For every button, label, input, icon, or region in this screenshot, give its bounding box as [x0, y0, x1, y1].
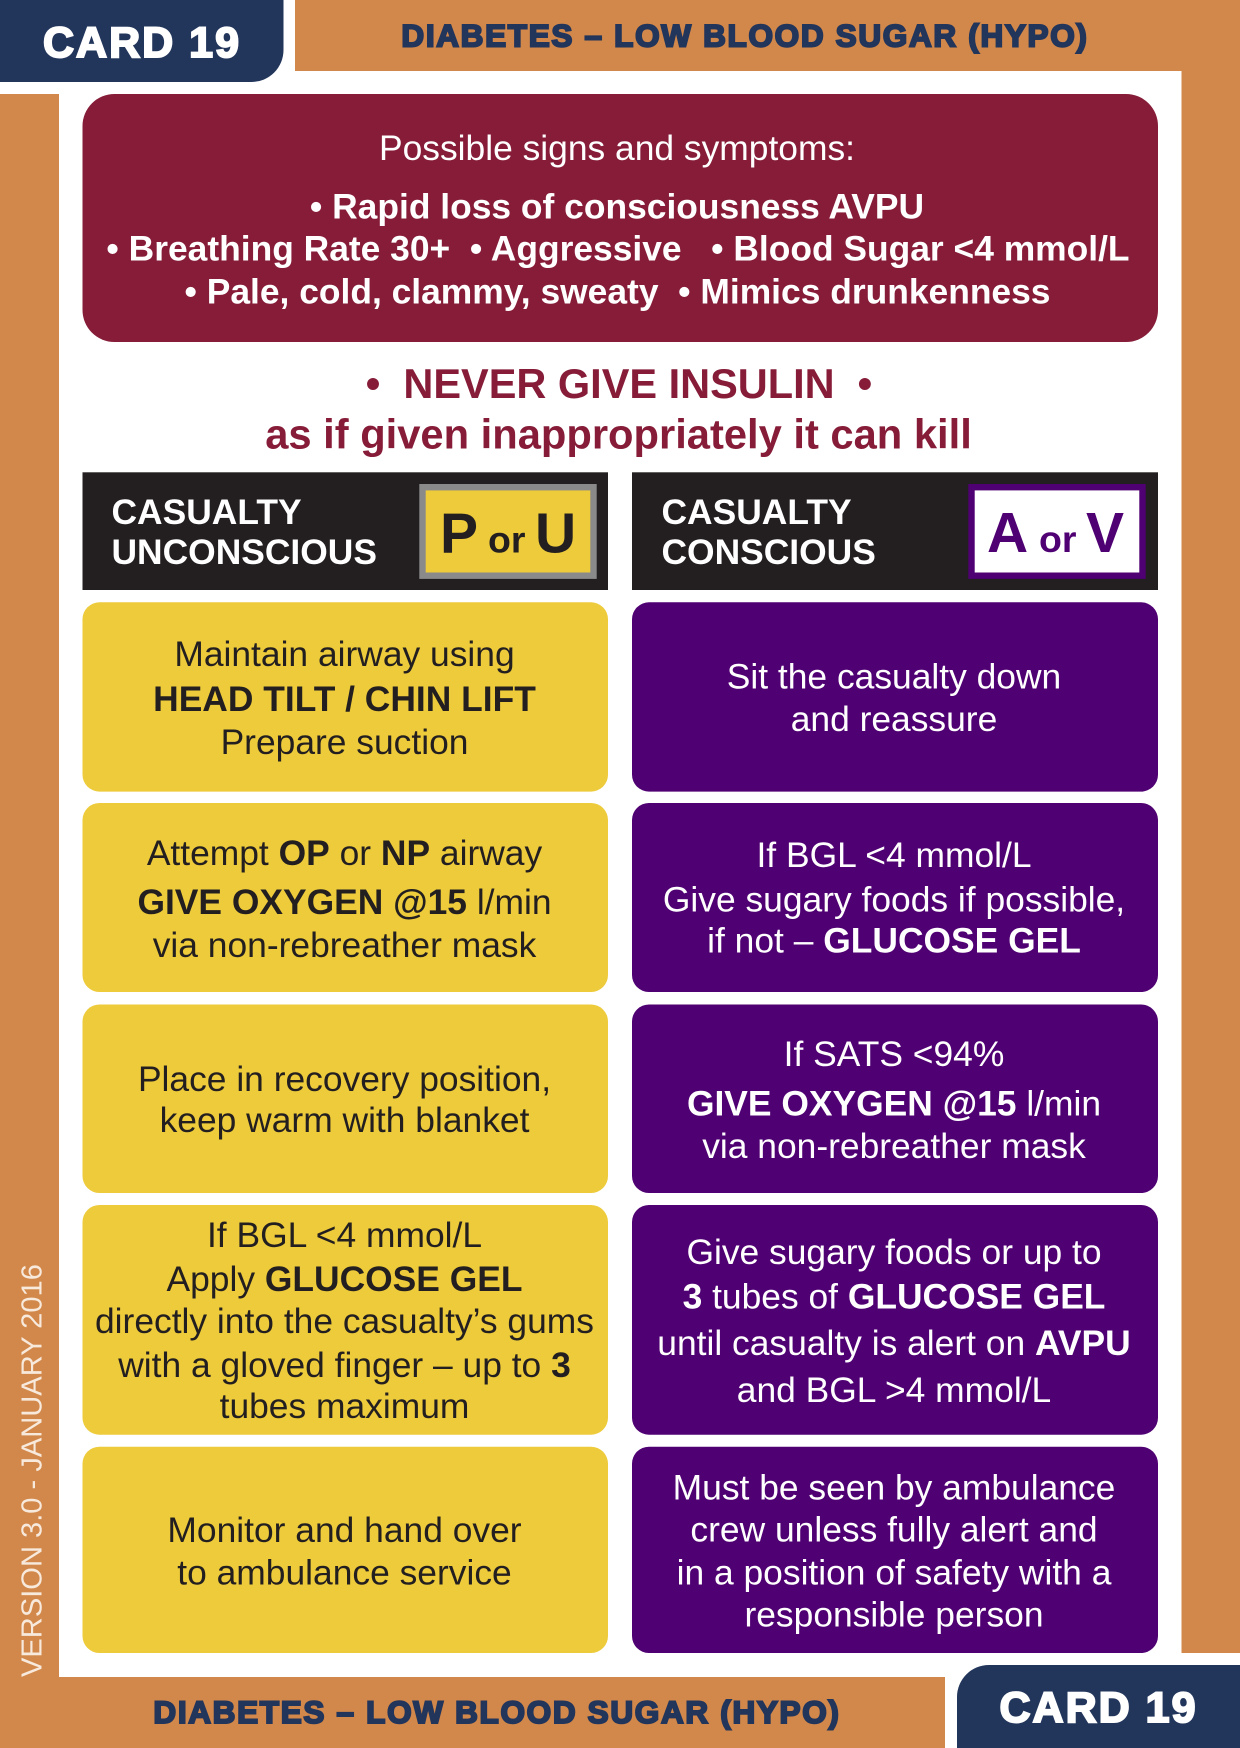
- header label: CASUALTY: [112, 492, 302, 532]
- card: unconscious step 5: to ambulance service: [177, 1552, 512, 1592]
- card: unconscious step 4: with a gloved finger – up to 3: [117, 1345, 571, 1385]
- header label: UNCONSCIOUS: [112, 532, 377, 572]
- bottom card badge: [957, 1665, 1240, 1748]
- bottom title: DIABETES – LOW BLOOD SUGAR (HYPO): [153, 1694, 841, 1730]
- badge: A or V: V: [1086, 501, 1124, 565]
- card: conscious step 3: [632, 1004, 1158, 1193]
- card: unconscious step 3: Place in recovery position,: [138, 1059, 551, 1099]
- symptoms list: • Pale, cold, clammy, sweaty • Mimics drunkenness: [185, 272, 1050, 312]
- badge: A or V: or: [1039, 518, 1077, 560]
- card: conscious step 4: 3 tubes of GLUCOSE GEL: [683, 1276, 1105, 1316]
- card: conscious step 2: If BGL <4 mmol/L: [756, 835, 1032, 875]
- card: unconscious step 4: [82, 1205, 608, 1435]
- header label: CONSCIOUS: [662, 532, 876, 572]
- symptoms heading: Possible signs and symptoms:: [379, 128, 855, 168]
- card: conscious step 1: Sit the casualty down: [727, 656, 1061, 696]
- top card badge: [0, 0, 284, 82]
- card: conscious step 4: until casualty is alert on AVPU: [657, 1323, 1131, 1363]
- card: unconscious step 2: Attempt OP or NP airway: [147, 833, 542, 873]
- card: unconscious step 2: [82, 803, 608, 992]
- warning: never give insulin: as if given inappropriately it can kill: [265, 410, 972, 458]
- card: conscious step 3: via non-rebreather mask: [702, 1126, 1086, 1166]
- top card badge: CARD 19: [43, 19, 241, 67]
- bottom card badge: CARD 19: [1000, 1684, 1198, 1732]
- header label: CASUALTY: [662, 492, 852, 532]
- warning: never give insulin: [265, 360, 972, 458]
- badge: P or U: U: [535, 501, 576, 565]
- card: conscious step 2: if not – GLUCOSE GEL: [707, 920, 1081, 960]
- card: unconscious step 3: keep warm with blanket: [160, 1100, 530, 1140]
- header label: [662, 492, 876, 572]
- badge: P or U: or: [488, 518, 526, 560]
- card: conscious step 5: [632, 1447, 1158, 1653]
- card: conscious step 1: [632, 602, 1158, 792]
- card: conscious step 3: If SATS <94%: [784, 1034, 1004, 1074]
- card: unconscious step 4: If BGL <4 mmol/L: [207, 1215, 482, 1255]
- card: conscious step 5: crew unless fully alert and: [690, 1510, 1098, 1550]
- header label: [112, 492, 377, 572]
- card: conscious step 2: [632, 803, 1158, 992]
- card: unconscious step 2: GIVE OXYGEN @15 l/min: [137, 882, 552, 922]
- badge: A or V: A: [987, 501, 1028, 565]
- card: conscious step 4: Give sugary foods or up to: [686, 1232, 1102, 1272]
- card: conscious step 4: [632, 1205, 1158, 1435]
- card: conscious step 1: and reassure: [791, 699, 997, 739]
- warning: never give insulin: • NEVER GIVE INSULIN •: [366, 360, 872, 407]
- card: conscious step 5: Must be seen by ambulance: [673, 1468, 1115, 1508]
- symptoms list: [106, 186, 1130, 312]
- card: unconscious step 5: [82, 1447, 608, 1653]
- panel: signs and symptoms: [82, 94, 1158, 342]
- version note: VERSION 3.0 - JANUARY 2016: [16, 1264, 48, 1677]
- symptoms list: • Rapid loss of consciousness AVPU: [310, 186, 924, 226]
- card: unconscious step 1: Maintain airway using: [174, 634, 515, 674]
- card: conscious step 5: in a position of safety with a: [677, 1552, 1112, 1592]
- card: unconscious step 4: directly into the casualty’s gums: [95, 1301, 594, 1341]
- badge: P or U: P: [440, 501, 478, 565]
- card: unconscious step 2: via non-rebreather mask: [153, 925, 537, 965]
- card: conscious step 3: GIVE OXYGEN @15 l/min: [687, 1084, 1101, 1124]
- card: unconscious step 3: [82, 1004, 608, 1193]
- card: conscious step 5: responsible person: [744, 1594, 1044, 1634]
- badge: P or U: [422, 487, 594, 576]
- top title: DIABETES – LOW BLOOD SUGAR (HYPO): [401, 18, 1089, 54]
- header: casualty conscious: [632, 472, 1158, 590]
- card: unconscious step 4: Apply GLUCOSE GEL: [167, 1259, 522, 1299]
- card: unconscious step 1: [82, 602, 608, 792]
- badge: A or V: [972, 487, 1142, 576]
- card: unconscious step 1: Prepare suction: [221, 722, 468, 762]
- card: conscious step 2: Give sugary foods if possible,: [663, 880, 1125, 920]
- header: casualty unconscious: [82, 472, 608, 590]
- symptoms list: • Breathing Rate 30+ • Aggressive • Blood Sugar <4 mmol/L: [106, 228, 1130, 268]
- card: unconscious step 4: tubes maximum: [220, 1386, 469, 1426]
- card: unconscious step 1: HEAD TILT / CHIN LIFT: [153, 679, 536, 719]
- card: unconscious step 5: Monitor and hand over: [167, 1510, 522, 1550]
- card: conscious step 4: and BGL >4 mmol/L: [737, 1370, 1051, 1410]
